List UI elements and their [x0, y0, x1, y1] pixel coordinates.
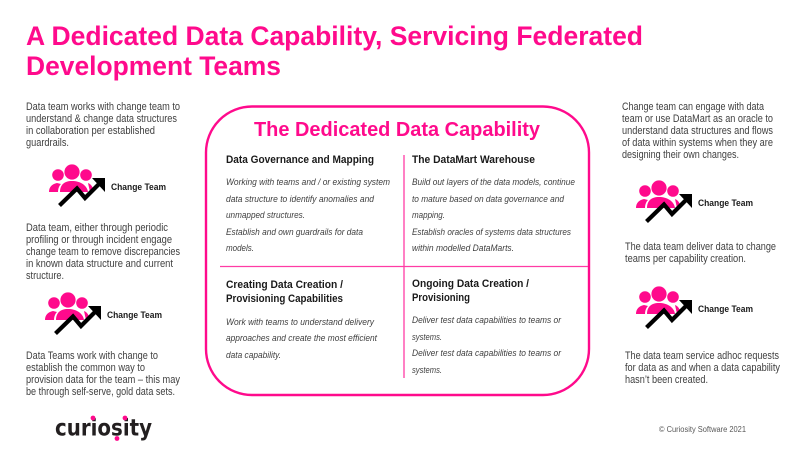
- quadrant: data governance and mapping: Working with teams and / or existing system: [226, 177, 390, 187]
- text block: right adhoc: [625, 350, 781, 386]
- text block: left profiling: [26, 222, 180, 282]
- icon: change team 1: [49, 164, 166, 206]
- icon: change team 4: [636, 286, 753, 328]
- quadrant: the datamart warehouse: Establish oracles of systems data structures: [412, 227, 571, 237]
- text block: left collaboration: in collaboration per established: [26, 125, 155, 137]
- text block: left profiling: in known data structure and current: [26, 258, 173, 270]
- quadrant: the datamart warehouse: within modelled DataMarts.: [412, 243, 514, 253]
- quadrant: data governance and mapping: Data Governance and Mapping: [226, 154, 374, 166]
- text block: left provisioning: [26, 350, 181, 398]
- text block: right deliver: teams per capability creation.: [625, 253, 746, 265]
- text block: right oracle: of data within systems when they are: [622, 137, 773, 149]
- quadrant: ongoing data creation: [412, 278, 562, 375]
- text block: right deliver: The data team deliver data to change: [625, 241, 776, 253]
- icon: change team 3: Change Team: [698, 197, 753, 208]
- quadrant: data governance and mapping: Establish and own guardrails for data: [226, 227, 363, 237]
- quadrant: ongoing data creation: Deliver test data capabilities to teams or: [412, 348, 562, 358]
- text block: right deliver: [625, 241, 776, 265]
- quadrant: creating data creation: Provisioning Capabilities: [226, 293, 343, 305]
- panel heading: The Dedicated Data Capability: [254, 119, 541, 141]
- quadrant: data governance and mapping: data structure to identify anomalies and: [226, 194, 375, 204]
- quadrant: ongoing data creation: Provisioning: [412, 292, 470, 304]
- quadrant: creating data creation: data capability.: [226, 350, 281, 360]
- panel: the dedicated data capability: [206, 106, 589, 395]
- text block: right adhoc: hasn’t been created.: [625, 374, 708, 386]
- quadrant: data governance and mapping: models.: [226, 243, 254, 253]
- text block: left provisioning: be through self-serve, gold data sets.: [26, 386, 175, 398]
- text block: left provisioning: provision data for the team – this may: [26, 374, 181, 386]
- icon: change team 2: Change Team: [107, 309, 162, 320]
- text block: left profiling: structure.: [26, 270, 64, 282]
- text block: right oracle: team or use DataMart as an oracle to: [622, 113, 773, 125]
- quadrant: ongoing data creation: systems.: [412, 332, 442, 342]
- quadrant: ongoing data creation: Ongoing Data Creation /: [412, 278, 529, 290]
- text block: left collaboration: guardrails.: [26, 137, 69, 149]
- quadrant: the datamart warehouse: to mature based on data governance and: [412, 194, 565, 204]
- text block: left collaboration: Data team works with change team to: [26, 101, 180, 113]
- icon: change team 3: [636, 180, 753, 222]
- title: Development Teams: [26, 51, 281, 81]
- quadrant: creating data creation: [226, 279, 377, 360]
- text block: left profiling: Data team, either through periodic: [26, 222, 169, 234]
- quadrant: data governance and mapping: [226, 154, 390, 253]
- icon: change team 4: Change Team: [698, 303, 753, 314]
- text block: left profiling: change team to remove discrepancies: [26, 246, 180, 258]
- text block: right adhoc: for data as and when a data capability: [625, 362, 781, 374]
- quadrant: data governance and mapping: unmapped structures.: [226, 210, 305, 220]
- logo: curiosity: curiosity: [55, 416, 152, 442]
- icon: change team 2: [45, 292, 162, 334]
- quadrant: creating data creation: Creating Data Creation /: [226, 279, 343, 291]
- text block: left collaboration: [26, 101, 180, 149]
- quadrant: creating data creation: approaches and create the most efficient: [226, 333, 377, 343]
- title: [26, 21, 643, 81]
- text block: left provisioning: Data Teams work with change to: [26, 350, 158, 362]
- text block: left profiling: profiling or through incident engage: [26, 234, 172, 246]
- quadrant: the datamart warehouse: Build out layers of the data models, continue: [412, 177, 575, 187]
- copyright: © Curiosity Software 2021: [659, 425, 747, 434]
- title: A Dedicated Data Capability, Servicing Federated: [26, 21, 643, 51]
- icon: change team 1: Change Team: [111, 181, 166, 192]
- quadrant: the datamart warehouse: The DataMart Warehouse: [412, 154, 535, 166]
- text block: right oracle: Change team can engage with data: [622, 101, 764, 113]
- quadrant: ongoing data creation: systems.: [412, 365, 442, 375]
- text block: left provisioning: establish the common way to: [26, 362, 145, 374]
- text block: right oracle: designing their own changes.: [622, 149, 739, 161]
- quadrant: creating data creation: Work with teams to understand delivery: [226, 317, 374, 327]
- quadrant: the datamart warehouse: [412, 154, 575, 253]
- text block: left collaboration: understand & change data structures: [26, 113, 177, 125]
- text block: right oracle: understand data structures and flows: [622, 125, 773, 137]
- text block: right oracle: [622, 101, 773, 161]
- quadrant: the datamart warehouse: mapping.: [412, 210, 445, 220]
- quadrant: ongoing data creation: Deliver test data capabilities to teams or: [412, 315, 562, 325]
- text block: right adhoc: The data team service adhoc requests: [625, 350, 779, 362]
